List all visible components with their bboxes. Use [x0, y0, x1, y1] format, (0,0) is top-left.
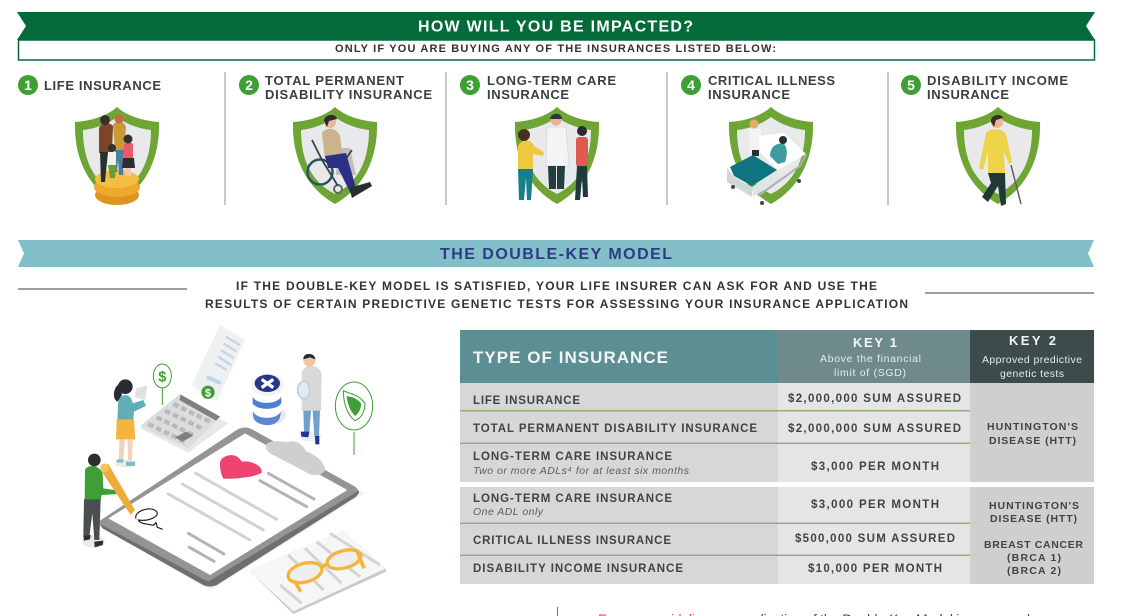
dollar pin [153, 364, 171, 405]
row: total permanent disability [473, 423, 961, 435]
row: disability income: $10,000 PER MONTH [808, 563, 942, 575]
banner: the double-key model [18, 240, 1094, 267]
receipt [192, 325, 245, 402]
row: long-term care, one ADL [473, 493, 939, 518]
calculator [140, 394, 228, 453]
row: critical illness: CRITICAL ILLNESS INSURANCE [473, 535, 671, 547]
insurance 1: life insurance: LIFE INSURANCE [44, 78, 161, 93]
table body backgrounds [460, 383, 1094, 584]
table header: limit of (SGD) [834, 367, 906, 379]
insurance 4: critical illness [681, 73, 835, 205]
banner: the double-key model: THE DOUBLE-KEY MODEL [440, 246, 672, 263]
table header: Above the financial [820, 353, 921, 365]
row: total permanent disability: TOTAL PERMANENT DISABILITY INSURANCE [473, 423, 757, 435]
insurance 5: disability income [901, 73, 1068, 206]
receipt: $ [205, 387, 211, 399]
row: long-term care, one ADL: One ADL only [473, 506, 544, 518]
divider [666, 72, 668, 205]
insurance 5: disability income: INSURANCE [927, 87, 1009, 102]
table header [460, 330, 1094, 383]
insurance 3: long-term care: LONG-TERM CARE [487, 73, 616, 88]
row: long-term care, two or more ADLs [473, 451, 939, 477]
insurance 5: disability income: 5 [907, 77, 915, 93]
right rule [925, 292, 1094, 294]
key 2 cell: huntington's and breast cancer [984, 500, 1083, 577]
dollar pin: $ [158, 370, 166, 386]
row: disability income [473, 563, 942, 575]
insurance 1: life insurance: 1 [24, 77, 32, 93]
man with pencil [82, 454, 135, 548]
key 2 cell: huntington's and breast cancer: (BRCA 2) [1007, 565, 1061, 577]
signature [136, 509, 163, 529]
banner: how will you be impacted: HOW WILL YOU BE IMPACTED? [418, 18, 693, 36]
insurance 3: long-term care: 3 [466, 77, 474, 93]
key 2 cell: huntington's: HUNTINGTON'S [987, 421, 1078, 433]
key 2 cell: huntington's and breast cancer: DISEASE (HTT) [990, 513, 1077, 525]
divider [888, 72, 889, 205]
insurance 1: life insurance [18, 75, 161, 205]
subheading box: ONLY IF YOU ARE BUYING ANY OF THE INSURANCES LISTED BELOW: [335, 43, 776, 55]
key 2 cell: huntington's and breast cancer: (BRCA 1) [1007, 552, 1061, 564]
row: long-term care, one ADL: $3,000 PER MONTH [811, 499, 939, 511]
insurance 2: total permanent disability: TOTAL PERMANENT [265, 73, 404, 88]
divider [446, 72, 447, 205]
table header: KEY 1 [853, 335, 897, 350]
document with glasses [248, 530, 386, 614]
insurance 4: critical illness: CRITICAL ILLNESS [708, 73, 835, 88]
table: type of insurance [460, 330, 1094, 584]
explanatory text: IF THE DOUBLE-KEY MODEL IS SATISFIED, YOUR LIFE INSURER CAN ASK FOR AND USE THE [236, 279, 877, 293]
divider [224, 72, 226, 205]
insurance 3: long-term care: INSURANCE [487, 87, 569, 102]
insurance 4: critical illness: 4 [687, 77, 695, 93]
row: critical illness [473, 533, 955, 547]
clipboard [100, 427, 365, 591]
table header: Approved predictive [982, 354, 1082, 366]
row: life insurance: $2,000,000 SUM ASSURED [788, 393, 961, 405]
heart [220, 455, 262, 479]
pill bottle [251, 374, 286, 425]
insurance 5: disability income: DISABILITY INCOME [927, 73, 1068, 88]
explanatory text [205, 279, 908, 311]
key 2 cell: huntington's [987, 421, 1078, 447]
key 2 cell: huntington's and breast cancer: HUNTINGTON'S [989, 500, 1079, 512]
insurance 2: total permanent disability: 2 [245, 77, 253, 93]
illustration: clipboard scene [82, 325, 386, 614]
insurance 2: total permanent disability: DISABILITY INSURANCE [265, 87, 432, 102]
explanatory text: RESULTS OF CERTAIN PREDICTIVE GENETIC TESTS FOR ASSESSING YOUR INSURANCE APPLICATION [205, 297, 908, 311]
row: critical illness: $500,000 SUM ASSURED [795, 533, 955, 545]
row: life insurance: LIFE INSURANCE [473, 395, 580, 407]
row: disability income: DISABILITY INCOME INSURANCE [473, 563, 683, 575]
key 2 cell: huntington's: DISEASE (HTT) [989, 435, 1076, 447]
row: long-term care, one ADL: LONG-TERM CARE INSURANCE [473, 493, 672, 505]
subheading box [18, 40, 1094, 60]
row: total permanent disability: $2,000,000 SUM ASSURED [788, 423, 961, 435]
woman with paper [114, 379, 147, 467]
shield pin [335, 382, 373, 455]
insurance 4: critical illness: INSURANCE [708, 87, 790, 102]
insurance 2: total permanent disability [239, 73, 432, 204]
insurance 3: long-term care [460, 73, 616, 204]
doctor with magnifier [298, 354, 322, 444]
key 2 cell: huntington's and breast cancer: BREAST CANCER [984, 539, 1083, 551]
row: life insurance [473, 393, 961, 407]
clip [266, 441, 325, 475]
table header: genetic tests [1000, 368, 1064, 380]
table header: TYPE OF INSURANCE [473, 348, 668, 367]
table header: KEY 2 [1009, 333, 1056, 348]
left rule [18, 288, 187, 290]
row: long-term care, two or more ADLs: LONG-TERM CARE INSURANCE [473, 451, 672, 463]
form lines [168, 473, 277, 540]
row: long-term care, two or more ADLs: Two or more ADLs⁴ for at least six months [473, 465, 690, 477]
banner: how will you be impacted [17, 12, 1095, 40]
row: long-term care, two or more ADLs: $3,000 PER MONTH [811, 461, 939, 473]
